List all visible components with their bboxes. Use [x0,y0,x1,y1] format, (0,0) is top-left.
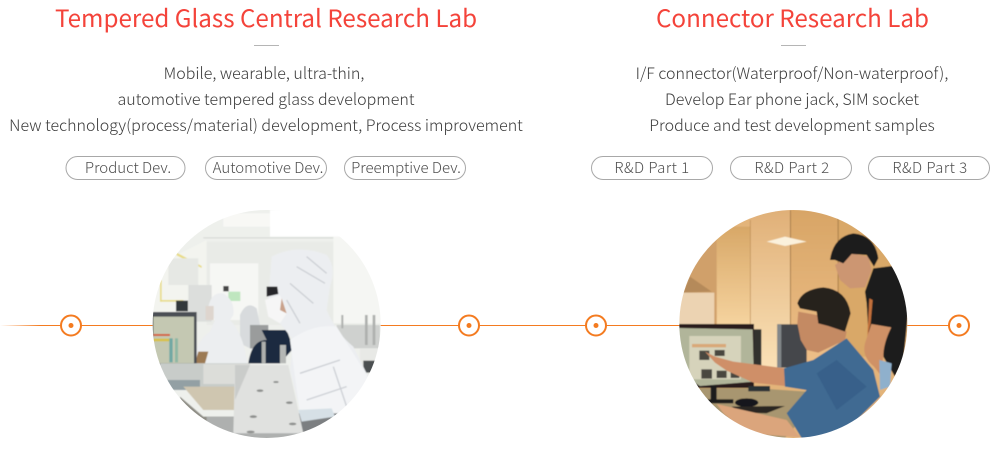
tag: R&D Part 1 [592,156,712,180]
description: tempered glass lab: automotive tempered glass development [118,86,415,110]
title: tempered glass lab: Tempered Glass Central Research Lab [55,0,477,34]
description: connector lab [636,45,948,136]
tag: R&D Part 1: R&D Part 1 [614,157,690,178]
title: connector lab: Connector Research Lab [656,0,929,34]
tag: R&D Part 2 [730,156,852,180]
marker: timeline node 1 [61,316,81,336]
tag: R&D Part 3: R&D Part 3 [892,157,968,178]
marker: timeline node 3 [586,316,606,336]
photo: engineers at monitor [679,210,908,438]
marker: timeline node 2 [459,316,479,336]
panel: connector lab [592,0,990,180]
marker: timeline node 4 [949,316,969,336]
description: connector lab: Produce and test development samples [649,112,935,136]
tag: Automotive Dev.: Automotive Dev. [213,157,323,178]
tag: Product Dev. [66,156,185,180]
tag: R&D Part 3 [868,156,990,180]
tag: Preemptive Dev.: Preemptive Dev. [351,157,461,178]
description: tempered glass lab: New technology(process/material) development, Process improvement [9,112,523,136]
panel: tempered glass lab [9,0,523,180]
photo: cleanroom workers [152,210,381,438]
tag: R&D Part 2: R&D Part 2 [754,157,830,178]
description: tempered glass lab [9,45,523,136]
description: connector lab: I/F connector(Waterproof/Non-waterproof), [636,60,948,84]
tag: Product Dev.: Product Dev. [85,157,171,178]
description: tempered glass lab: Mobile, wearable, ultra-thin, [164,60,364,84]
description: connector lab: Develop Ear phone jack, SIM socket [665,86,919,110]
timeline line [0,325,959,326]
